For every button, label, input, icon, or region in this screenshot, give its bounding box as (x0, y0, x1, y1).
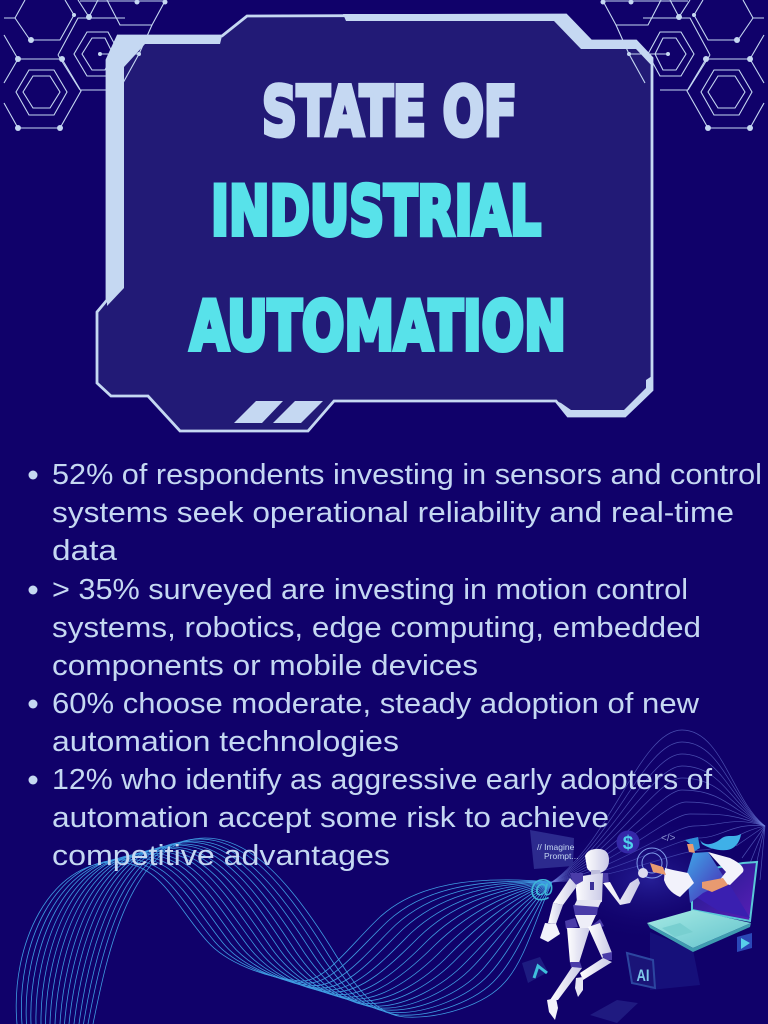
hexagon network: top left (4, 0, 168, 131)
title: INDUSTRIAL (211, 172, 541, 252)
AI card (627, 953, 655, 988)
at sign icon: @ (529, 875, 555, 903)
floor tile (590, 1000, 638, 1023)
title: STATE OF (262, 73, 517, 152)
bullet list: 60% choose moderate, steady adoption of new (52, 688, 700, 720)
bullet list: automation accept some risk to achieve (52, 802, 609, 834)
dollar icon (616, 830, 640, 854)
bullet list (28, 459, 762, 872)
title: AUTOMATION (190, 288, 566, 366)
touch rings (637, 848, 667, 878)
laptop pedestal (650, 932, 700, 990)
play card (737, 933, 752, 952)
bullet list: 12% who identify as aggressive early adopters of (52, 764, 713, 796)
bullet list: > 35% surveyed are investing in motion control (52, 574, 688, 606)
folder card (522, 957, 548, 983)
code tag: </> (661, 833, 676, 844)
robot (540, 849, 648, 1020)
panel: thick frame accents (107, 14, 652, 416)
prompt card (530, 830, 578, 869)
title (190, 73, 566, 366)
glow backdrop (545, 818, 755, 942)
prompt card: // Imagine (537, 842, 575, 852)
decorative slashes on frame (234, 401, 323, 423)
bullet list: 52% of respondents investing in sensors and control (52, 459, 762, 491)
AI card: AI (636, 966, 650, 985)
wave lines (16, 838, 552, 1024)
hexagon network: top right (600, 0, 764, 131)
bullet list: data (52, 535, 118, 567)
bullet list: automation technologies (52, 726, 399, 758)
prompt card: Prompt... (544, 851, 578, 861)
dollar icon: $ (623, 833, 634, 854)
wave arches: right hump (552, 730, 765, 882)
bullet list: competitive advantages (52, 840, 390, 872)
illustration: robot and person with laptop (522, 818, 757, 1023)
panel: title frame fill (97, 15, 652, 431)
bullet list: systems, robotics, edge computing, embedded (52, 612, 701, 644)
bullet list: systems seek operational reliability and real-time (52, 497, 734, 529)
person (650, 834, 750, 918)
laptop (647, 862, 757, 952)
bullet list: components or mobile devices (52, 650, 478, 682)
